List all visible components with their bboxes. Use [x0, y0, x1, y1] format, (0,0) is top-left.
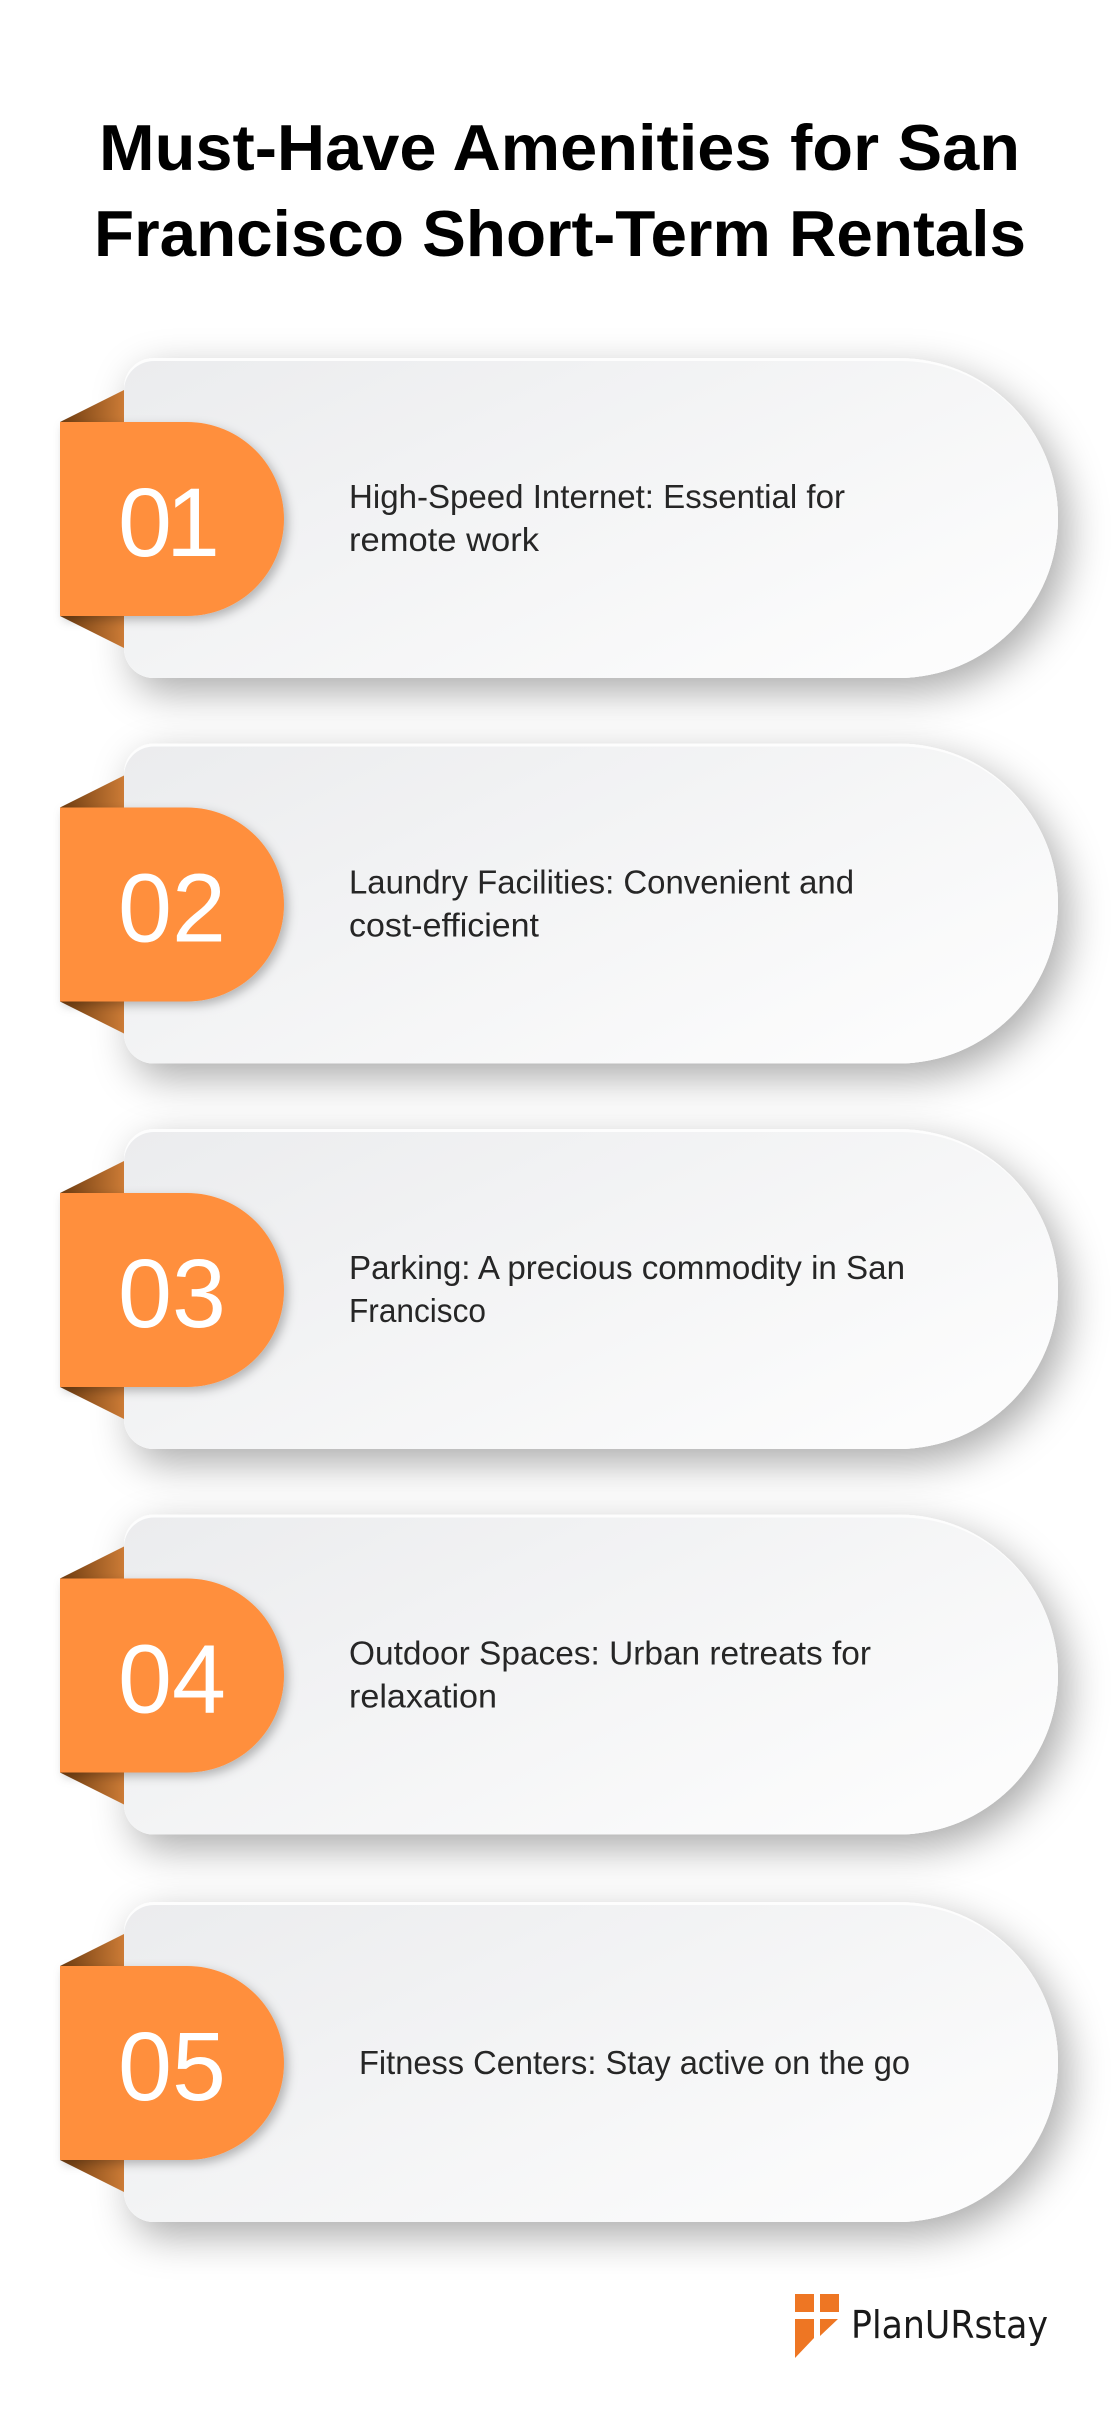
description 01: remote work	[349, 521, 540, 558]
number badge 02	[60, 808, 284, 1002]
panel: item 01 high-speed internet	[60, 358, 1058, 678]
number 02: 02	[118, 854, 226, 962]
description 02	[349, 864, 854, 944]
ribbon folds 03	[60, 1161, 124, 1419]
number 04: 04	[118, 1624, 226, 1734]
number badge 04	[60, 1578, 284, 1772]
ribbon folds 01	[60, 390, 124, 648]
number badge 03	[60, 1193, 284, 1387]
ribbon folds 05	[60, 1934, 124, 2192]
description 05: Fitness Centers: Stay active on the go	[359, 2044, 910, 2081]
ribbon folds 02	[60, 776, 124, 1034]
description 02: cost-efficient	[349, 906, 539, 944]
logo: PlanURstay	[795, 2294, 1048, 2358]
description 03: Francisco	[349, 1292, 486, 1329]
description 02: Laundry Facilities: Convenient and	[349, 864, 854, 900]
logo wordmark: PlanURstay	[851, 2303, 1048, 2347]
description 04: relaxation	[349, 1678, 497, 1714]
title	[94, 111, 1026, 270]
card background 05	[124, 1902, 1058, 2222]
description 03	[349, 1249, 905, 1329]
description 03: Parking: A precious commodity in San	[349, 1249, 905, 1286]
number 05: 05	[118, 2012, 226, 2121]
card background 03	[124, 1129, 1058, 1449]
description 04	[349, 1634, 871, 1714]
description 01	[349, 478, 845, 558]
number 03: 03	[118, 1239, 226, 1348]
description 04: Outdoor Spaces: Urban retreats for	[349, 1634, 871, 1672]
description 01: High-Speed Internet: Essential for	[349, 478, 845, 515]
number badge 01	[60, 422, 284, 616]
panel: item 04 outdoor spaces	[60, 1514, 1058, 1834]
title: Must-Have Amenities for San	[99, 111, 1020, 184]
icon: logo mark	[795, 2294, 839, 2358]
panel: item 03 parking	[60, 1129, 1058, 1449]
panel: item 02 laundry facilities	[60, 744, 1058, 1064]
card background 01	[124, 358, 1058, 678]
number 01: 01	[118, 468, 216, 577]
panel: item 05 fitness centers	[60, 1902, 1058, 2222]
card background 02	[124, 744, 1058, 1064]
ribbon folds 04	[60, 1546, 124, 1804]
number badge 05	[60, 1966, 284, 2160]
card background 04	[124, 1514, 1058, 1834]
title: Francisco Short-Term Rentals	[94, 197, 1026, 270]
